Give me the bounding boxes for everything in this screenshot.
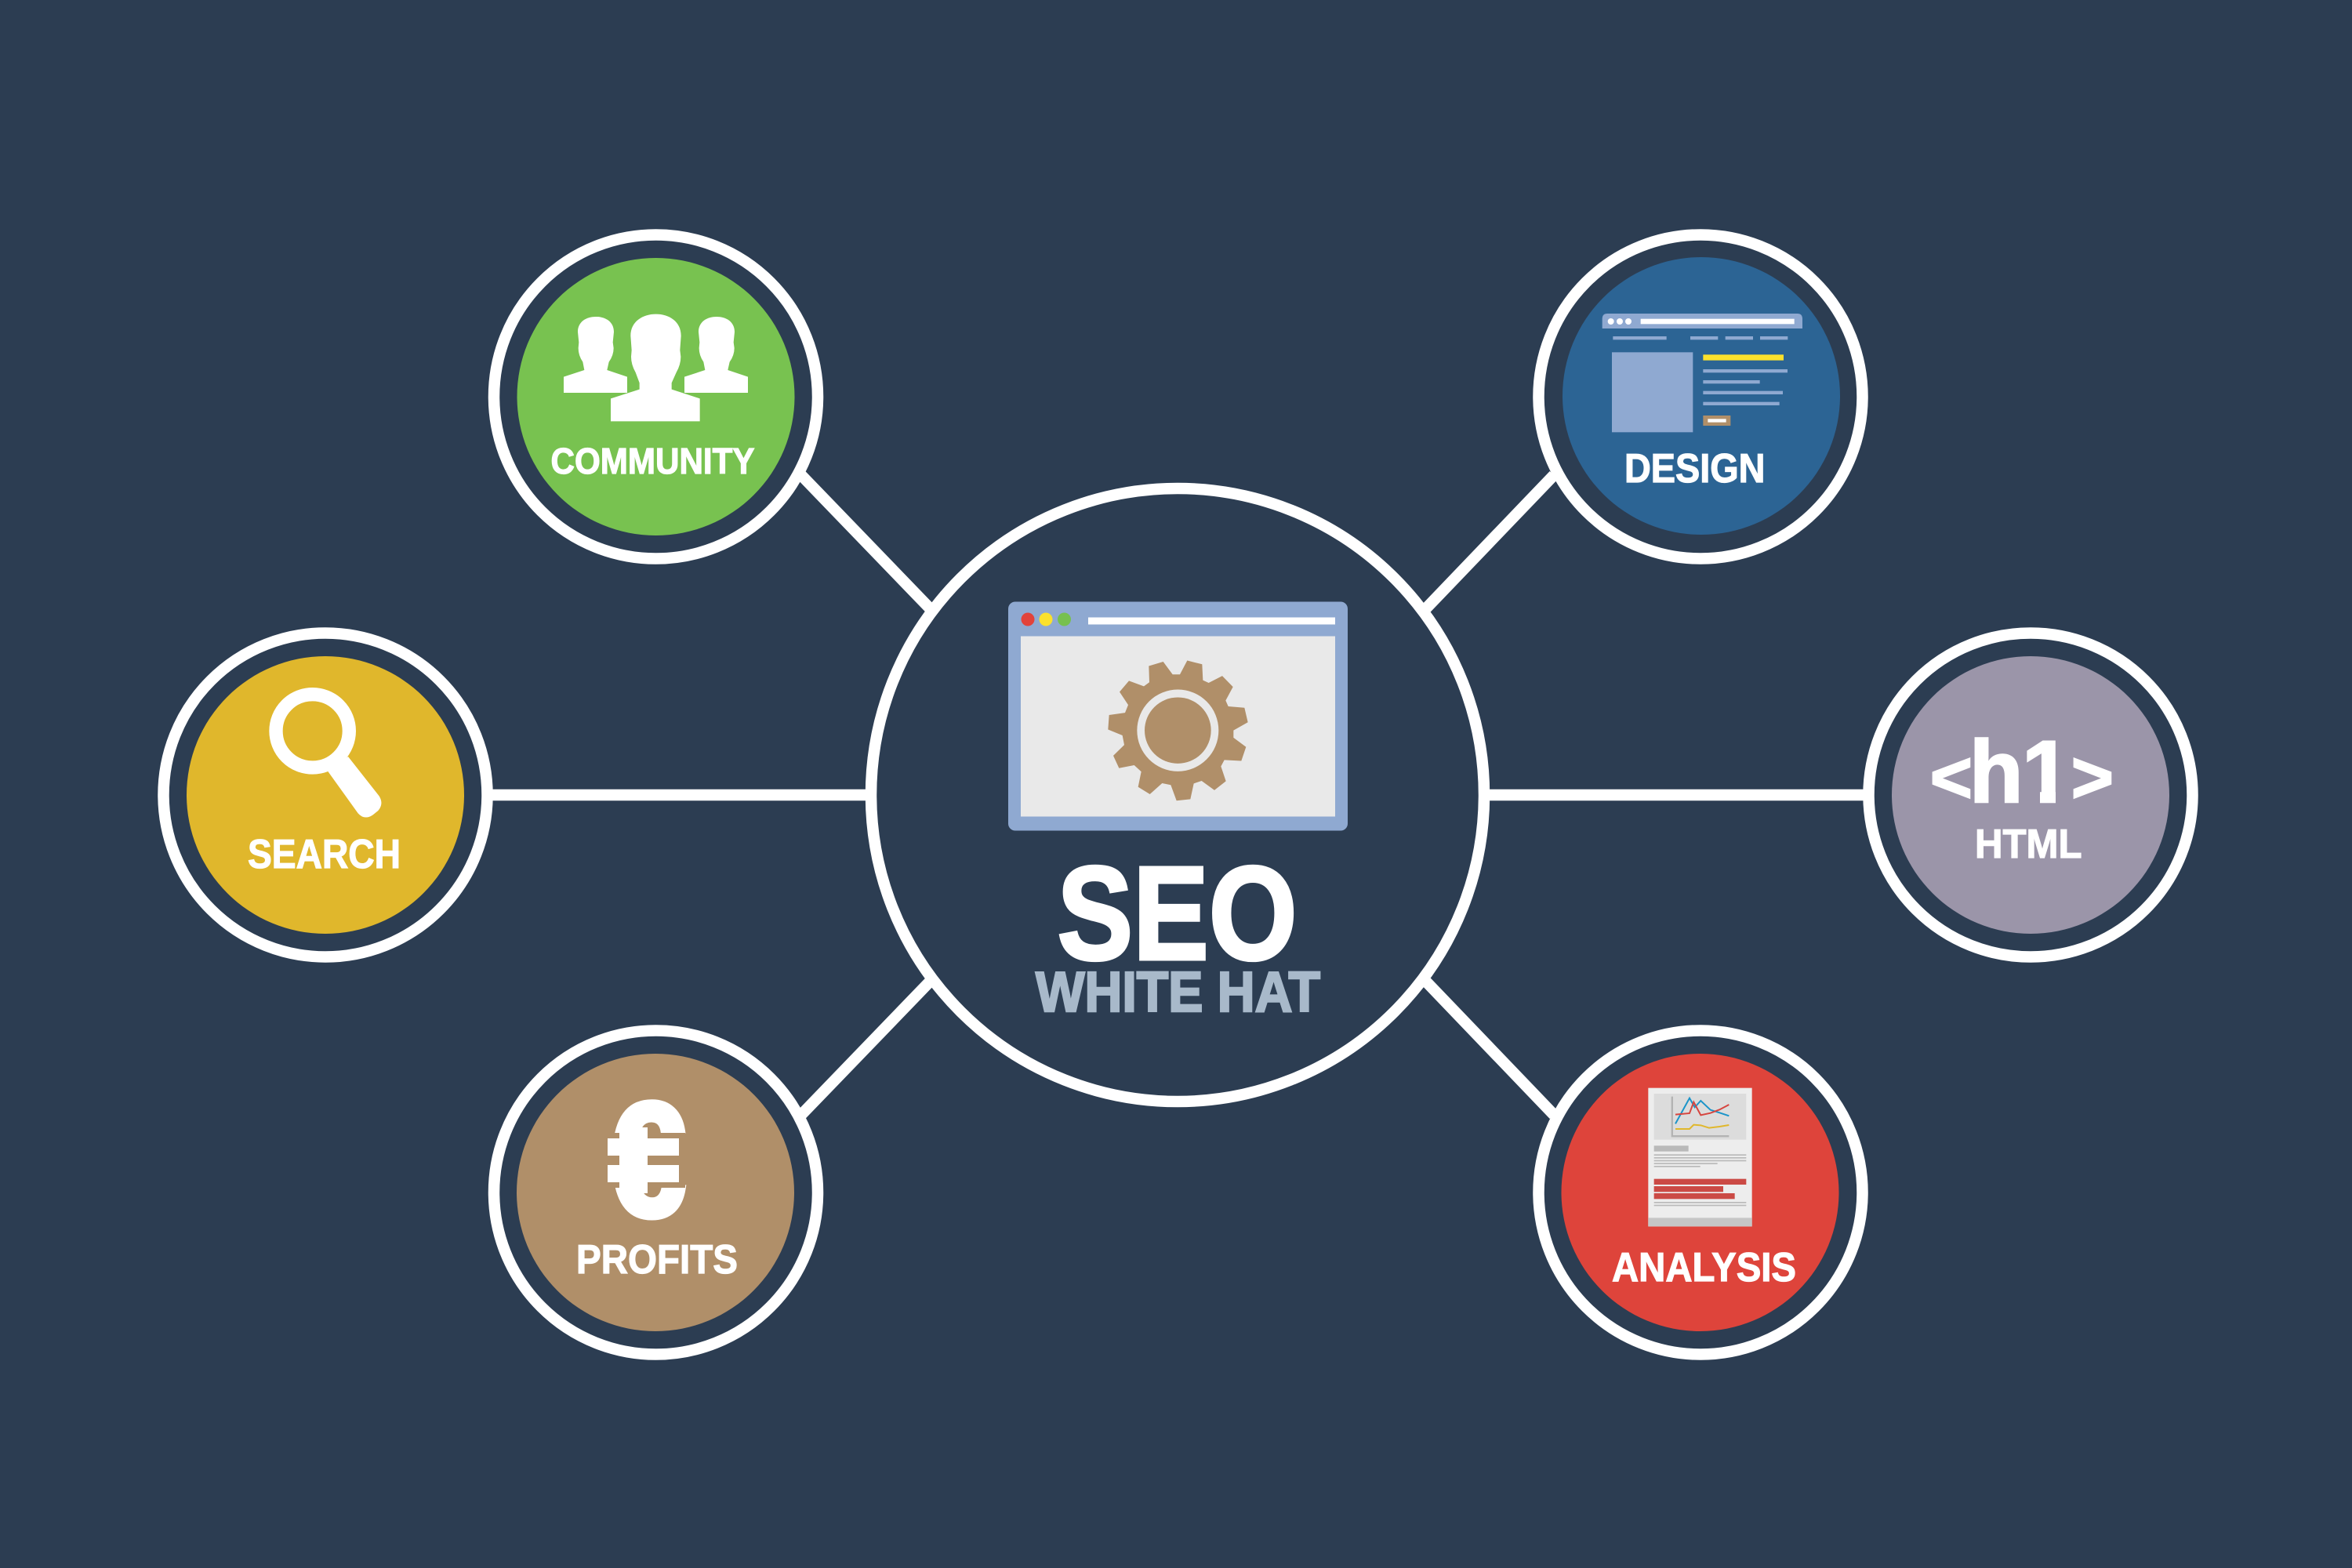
profits ring (494, 1030, 818, 1355)
search ring (163, 633, 488, 956)
profits disc (517, 1054, 794, 1331)
node: profits (494, 1030, 818, 1355)
central hub (871, 488, 1484, 1102)
community ring (494, 235, 818, 558)
mask: flat foot of the numeral (2020, 792, 2073, 804)
icon: h1 tag: 1 (2022, 723, 2071, 821)
icon: h1 tag: < (1930, 738, 1973, 818)
browser window icon (1008, 602, 1348, 831)
analysis ring (1538, 1030, 1863, 1355)
design disc (1563, 257, 1840, 535)
icon: report document (1648, 1088, 1752, 1226)
icon: magnifying glass (276, 695, 381, 818)
icon: euro sign: € (606, 1069, 686, 1251)
label: DESIGN: DESIGN (1624, 446, 1766, 492)
html ring (1869, 633, 2192, 956)
html disc (1892, 656, 2169, 934)
subtitle: WHITE HAT: WHITE HAT (1036, 961, 1320, 1024)
node: search (163, 633, 488, 956)
hub ring (871, 488, 1484, 1102)
label: SEARCH: SEARCH (248, 832, 401, 877)
community disc (517, 258, 795, 535)
node: community (494, 235, 818, 558)
search disc (187, 656, 464, 934)
icon: web page layout (1602, 314, 1802, 432)
icon: h1 tag: h (1969, 723, 2023, 821)
node: design (1538, 235, 1863, 558)
design ring (1538, 235, 1863, 558)
title: SEO: SEO (1057, 839, 1297, 988)
gear icon (1108, 660, 1248, 800)
label: ANALYSIS: ANALYSIS (1612, 1245, 1796, 1290)
label: COMMUNITY: COMMUNITY (550, 441, 754, 481)
analysis disc (1562, 1054, 1839, 1331)
icon: three people (564, 314, 748, 421)
label: PROFITS: PROFITS (576, 1237, 738, 1283)
node: html (1869, 633, 2192, 956)
label: HTML: HTML (1975, 822, 2082, 867)
connector lines (490, 475, 1867, 1115)
node: analysis (1538, 1030, 1863, 1355)
icon: h1 tag: > (2071, 738, 2114, 818)
